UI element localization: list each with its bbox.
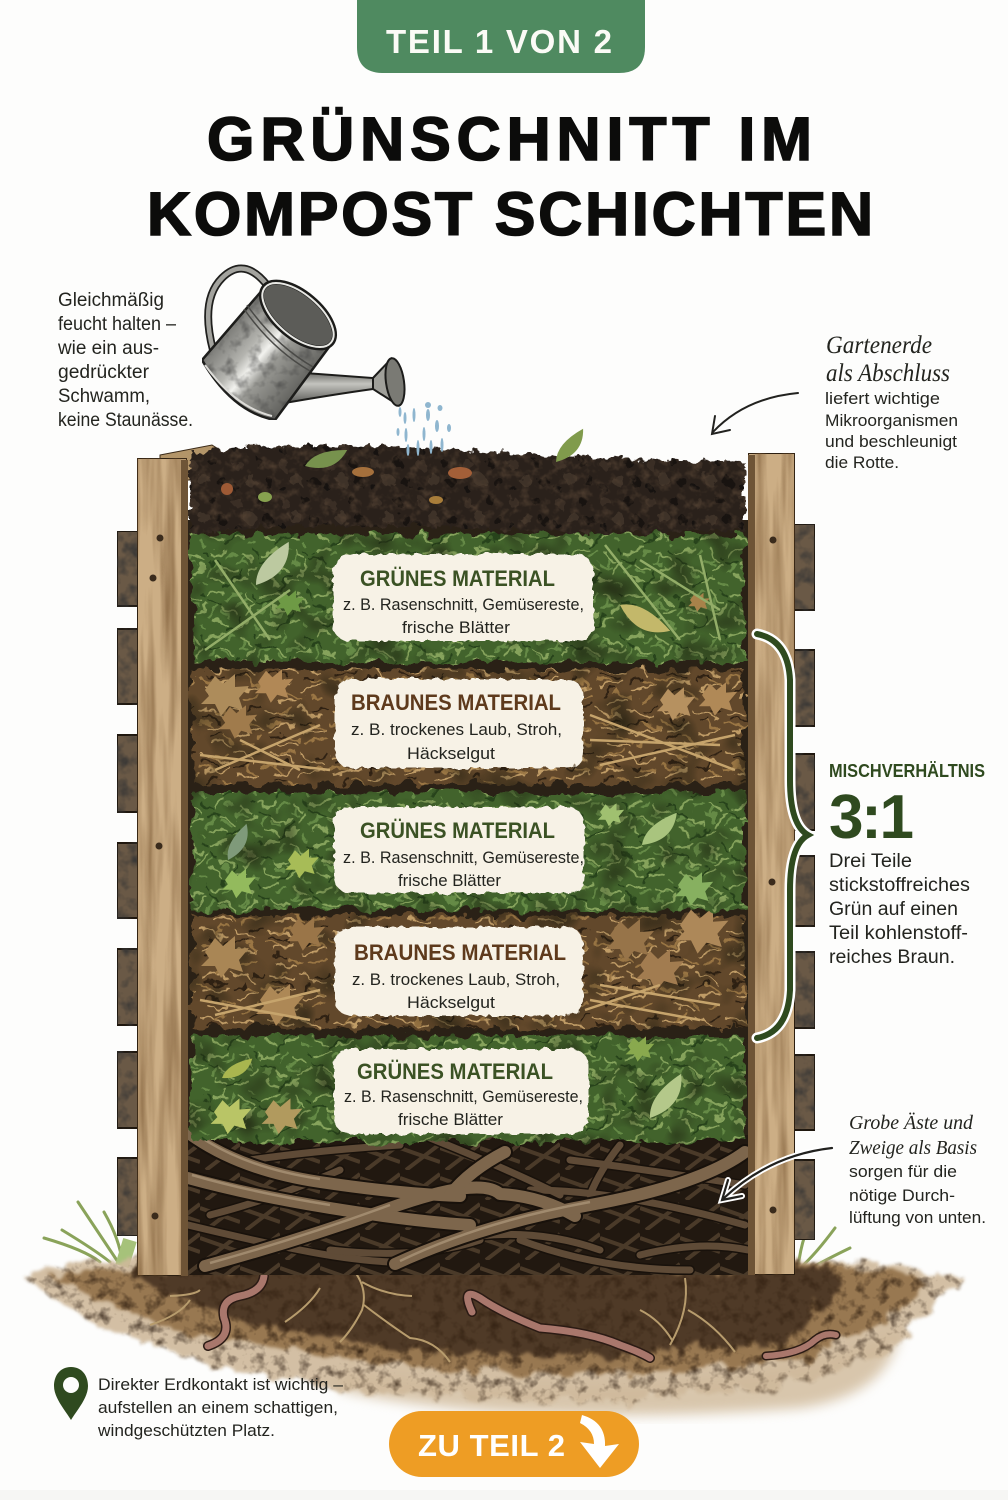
label: brown material 2 bbox=[335, 927, 583, 1016]
label: brown material 2: Häckselgut bbox=[407, 993, 495, 1012]
callout: garden soil as cover: Mikroorganismen bbox=[825, 411, 958, 430]
label: green material 3 bbox=[334, 1049, 588, 1134]
green layer 3 bbox=[192, 1036, 744, 1142]
header tab: part 1 of 2 bbox=[357, 0, 645, 73]
label: brown material 2: z. B. trockenes Laub, Stroh, bbox=[352, 970, 560, 989]
callout: garden soil as cover: und beschleunigt bbox=[825, 432, 957, 451]
label: green material 1: GRÜNES MATERIAL bbox=[360, 566, 555, 591]
left post bbox=[137, 458, 188, 1276]
arrow to soil layer bbox=[712, 393, 798, 434]
label: brown material 1 bbox=[335, 679, 583, 768]
header tab: part 1 of 2: TEIL 1 VON 2 bbox=[386, 23, 612, 60]
callout: garden soil as cover: die Rotte. bbox=[825, 453, 899, 472]
callout: garden soil as cover: als Abschluss bbox=[826, 360, 950, 387]
text: direct soil contact: aufstellen an einem schattigen, bbox=[98, 1398, 338, 1417]
mix ratio text: 3:1 bbox=[829, 783, 914, 852]
right slats bbox=[794, 524, 815, 1240]
mix ratio text bbox=[829, 761, 985, 968]
curly brace: mix ratio bbox=[757, 634, 808, 1038]
roots bbox=[150, 1272, 735, 1362]
text: keep evenly moist: feucht halten – bbox=[58, 314, 176, 335]
mix ratio text: stickstoffreiches bbox=[829, 875, 970, 896]
button: to part 2 bbox=[389, 1411, 639, 1477]
mix ratio text: Grün auf einen bbox=[829, 899, 958, 920]
rose bbox=[373, 357, 407, 407]
dark backing of the layers bbox=[187, 520, 749, 1150]
text: keep evenly moist: wie ein aus- bbox=[57, 338, 159, 359]
title: KOMPOST SCHICHTEN bbox=[147, 180, 873, 248]
icon: arrow down right bbox=[580, 1415, 619, 1468]
text: direct soil contact: Direkter Erdkontakt ist wichtig – bbox=[98, 1375, 344, 1394]
label: brown material 1: z. B. trockenes Laub, Stroh, bbox=[351, 720, 562, 739]
label: green material 3: z. B. Rasenschnitt, Gemüsereste, bbox=[344, 1087, 583, 1106]
text: direct soil contact bbox=[97, 1375, 344, 1440]
bands and base rim bbox=[205, 305, 313, 416]
callout: coarse branches as base: Grobe Äste und bbox=[849, 1111, 974, 1134]
label: green material 2: GRÜNES MATERIAL bbox=[360, 818, 555, 843]
label: green material 2: z. B. Rasenschnitt, Gemüsereste, bbox=[343, 848, 584, 867]
brown layer 2 bbox=[192, 907, 744, 1028]
mix ratio text: Drei Teile bbox=[829, 851, 912, 872]
label: green material 3: frische Blätter bbox=[398, 1110, 503, 1129]
body bbox=[202, 287, 332, 420]
branch base layer bbox=[186, 1131, 750, 1275]
label: green material 2: frische Blätter bbox=[398, 871, 501, 890]
mix ratio text: reiches Braun. bbox=[829, 947, 955, 968]
title: GRÜNSCHNITT IM bbox=[207, 105, 812, 173]
label: green material 1 bbox=[333, 554, 593, 641]
callout: coarse branches as base: nötige Durch- bbox=[849, 1186, 955, 1205]
mix ratio text: MISCHVERHÄLTNIS bbox=[829, 761, 985, 781]
text: keep evenly moist: Schwamm, bbox=[58, 386, 150, 407]
label: green material 2 bbox=[334, 807, 584, 893]
rim bbox=[250, 270, 346, 360]
brown layer 1 bbox=[192, 669, 744, 784]
icon: location pin bbox=[54, 1367, 88, 1420]
callout: garden soil as cover: Gartenerde bbox=[826, 332, 932, 359]
label: brown material 1: BRAUNES MATERIAL bbox=[351, 690, 561, 715]
text: keep evenly moist: keine Staunässe. bbox=[58, 410, 193, 431]
handle bbox=[208, 269, 267, 350]
watering can bbox=[202, 269, 451, 456]
text: keep evenly moist: gedrückter bbox=[58, 362, 150, 383]
label: brown material 1: Häckselgut bbox=[407, 744, 495, 763]
right post bbox=[748, 453, 795, 1275]
left slats bbox=[117, 531, 138, 1236]
callout: garden soil as cover: liefert wichtige bbox=[825, 389, 940, 408]
label: green material 3: GRÜNES MATERIAL bbox=[357, 1059, 553, 1084]
label: brown material 2: BRAUNES MATERIAL bbox=[354, 940, 566, 965]
spout bbox=[279, 373, 373, 404]
text: keep evenly moist bbox=[57, 290, 193, 431]
earthworms bbox=[208, 1276, 836, 1358]
button: to part 2: ZU TEIL 2 bbox=[418, 1428, 565, 1463]
back boards behind bin bbox=[160, 445, 220, 480]
callout: coarse branches as base: sorgen für die bbox=[849, 1162, 957, 1181]
callout: coarse branches as base bbox=[849, 1111, 986, 1227]
text: direct soil contact: windgeschützten Platz. bbox=[97, 1421, 275, 1440]
callout: coarse branches as base: lüftung von unten. bbox=[849, 1208, 986, 1227]
callout: coarse branches as base: Zweige als Basis bbox=[849, 1137, 977, 1159]
text: keep evenly moist: Gleichmäßig bbox=[58, 290, 164, 311]
top soil layer bbox=[190, 428, 745, 534]
arrow to branches bbox=[722, 1148, 832, 1200]
ground soil with worms and roots bbox=[22, 1261, 965, 1415]
green layer 1 bbox=[192, 534, 744, 662]
green layer 2 bbox=[192, 792, 744, 910]
bottom strip bbox=[0, 1490, 1008, 1500]
callout: garden soil as cover bbox=[825, 332, 958, 472]
title bbox=[147, 105, 873, 248]
grass tufts bbox=[44, 1202, 850, 1270]
water drops bbox=[396, 402, 451, 456]
label: green material 1: frische Blätter bbox=[402, 618, 510, 637]
mix ratio text: Teil kohlenstoff- bbox=[829, 923, 968, 944]
label: green material 1: z. B. Rasenschnitt, Gemüsereste, bbox=[343, 595, 584, 614]
